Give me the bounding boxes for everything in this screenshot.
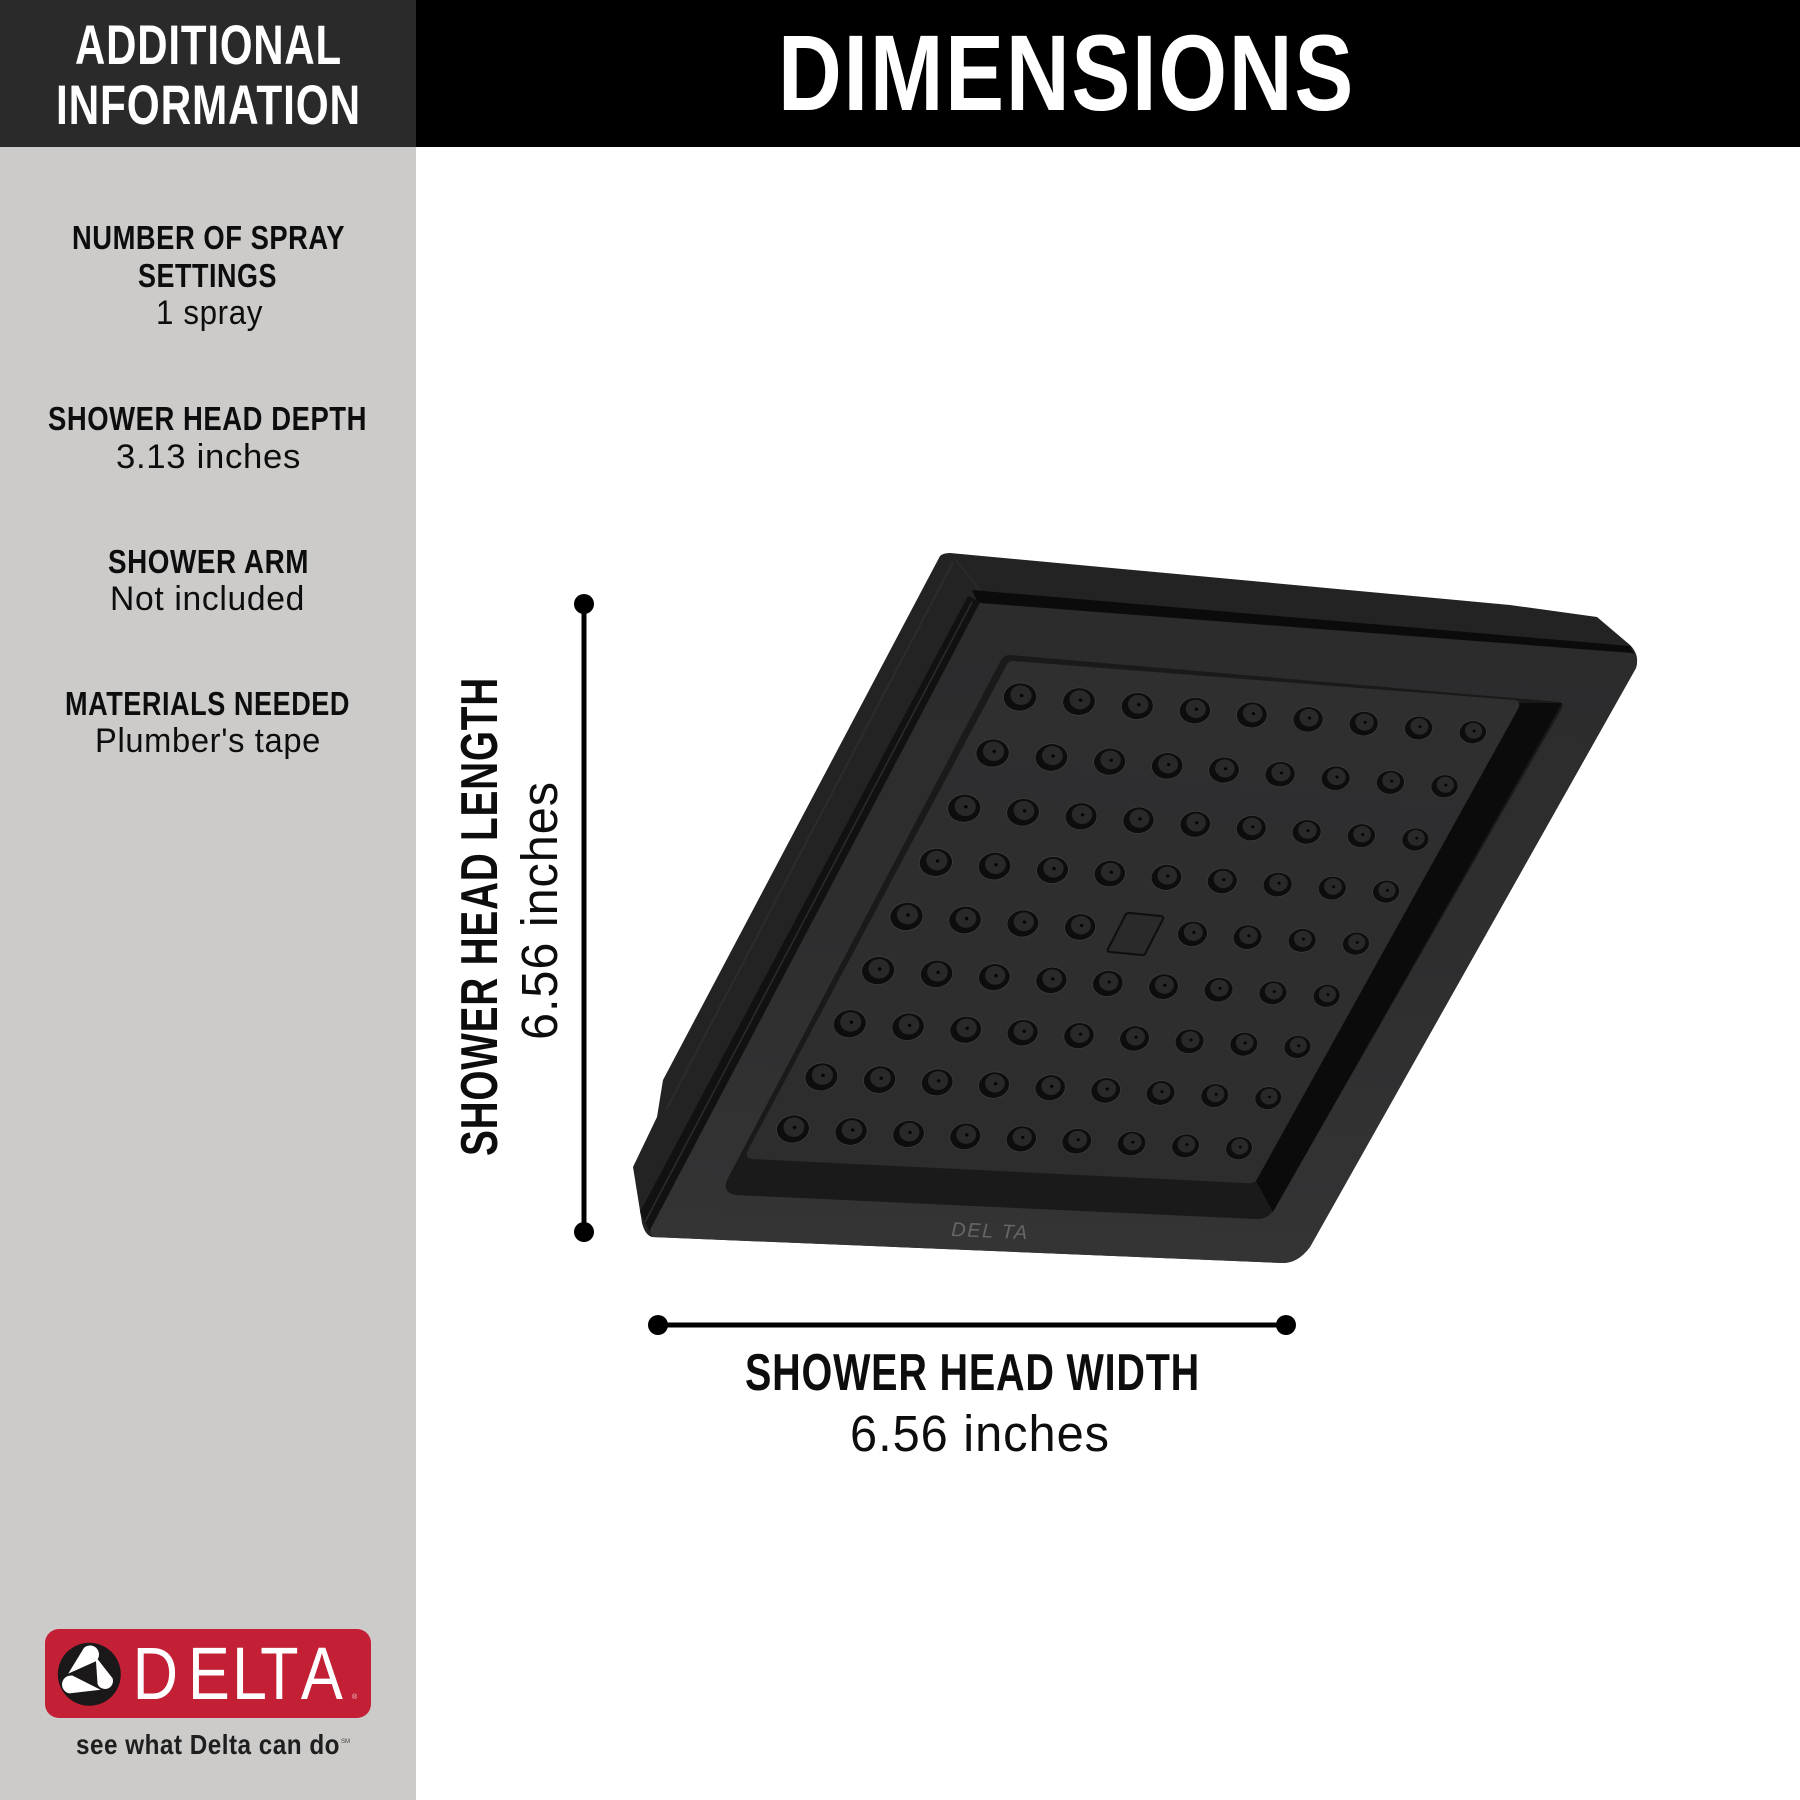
logo: delta: DELTA bbox=[133, 1632, 343, 1715]
spec: shower head depth: SHOWER HEAD DEPTH bbox=[48, 400, 367, 437]
heading: additional information: INFORMATION bbox=[56, 73, 361, 136]
spec: shower head depth bbox=[48, 400, 367, 476]
spec: shower arm: Not included bbox=[110, 580, 305, 618]
groove highlight bbox=[645, 602, 972, 1222]
brand mark on head: DEL TA bbox=[951, 1219, 1028, 1244]
spec: materials needed: MATERIALS NEEDED bbox=[65, 685, 350, 722]
recess bbox=[726, 655, 1562, 1219]
spec: shower head depth: 3.13 inches bbox=[116, 438, 301, 476]
spec: number of spray settings: 1 spray bbox=[156, 294, 263, 332]
label: shower head width bbox=[745, 1344, 1200, 1462]
spec: shower arm bbox=[108, 543, 309, 618]
left groove bbox=[640, 596, 980, 1232]
spec: number of spray settings: NUMBER OF SPRAY bbox=[72, 219, 345, 256]
inner frame face bbox=[650, 603, 1637, 1263]
spec: shower arm: SHOWER ARM bbox=[108, 543, 309, 580]
shower head image bbox=[633, 553, 1637, 1263]
nozzle plate bbox=[747, 661, 1519, 1183]
label: shower head length: 6.56 inches bbox=[511, 781, 568, 1040]
spec: materials needed: Plumber's tape bbox=[95, 722, 321, 760]
spec: materials needed bbox=[65, 685, 350, 760]
heading: additional information bbox=[0, 0, 416, 147]
right deep recess bbox=[1256, 703, 1562, 1212]
logo: delta bbox=[45, 1629, 371, 1760]
body outline bbox=[633, 553, 1637, 1263]
dimension arrow: length bbox=[574, 594, 594, 1242]
spec: number of spray settings bbox=[72, 219, 345, 332]
heading: additional information: ADDITIONAL bbox=[75, 13, 342, 76]
title bar: dimensions bbox=[416, 0, 1800, 147]
logo: delta: see what Delta can do bbox=[76, 1729, 340, 1760]
spec: number of spray settings: SETTINGS bbox=[138, 257, 277, 294]
top groove bbox=[972, 590, 1634, 654]
title bar: dimensions: DIMENSIONS bbox=[778, 12, 1355, 133]
label: shower head width: SHOWER HEAD WIDTH bbox=[745, 1344, 1200, 1402]
label: shower head length: SHOWER HEAD LENGTH bbox=[451, 677, 509, 1156]
logo: delta: SM bbox=[341, 1739, 350, 1745]
panel: sidebar background bbox=[0, 0, 416, 1800]
logo: delta: ® bbox=[352, 1693, 358, 1701]
label: shower head width: 6.56 inches bbox=[850, 1405, 1110, 1462]
left chamfer highlight bbox=[666, 562, 953, 1110]
corner facet bbox=[955, 559, 980, 590]
nozzle array bbox=[773, 677, 1489, 1167]
dimension arrow: width bbox=[648, 1315, 1296, 1335]
center square bbox=[1108, 913, 1163, 955]
label: shower head length bbox=[451, 677, 568, 1156]
